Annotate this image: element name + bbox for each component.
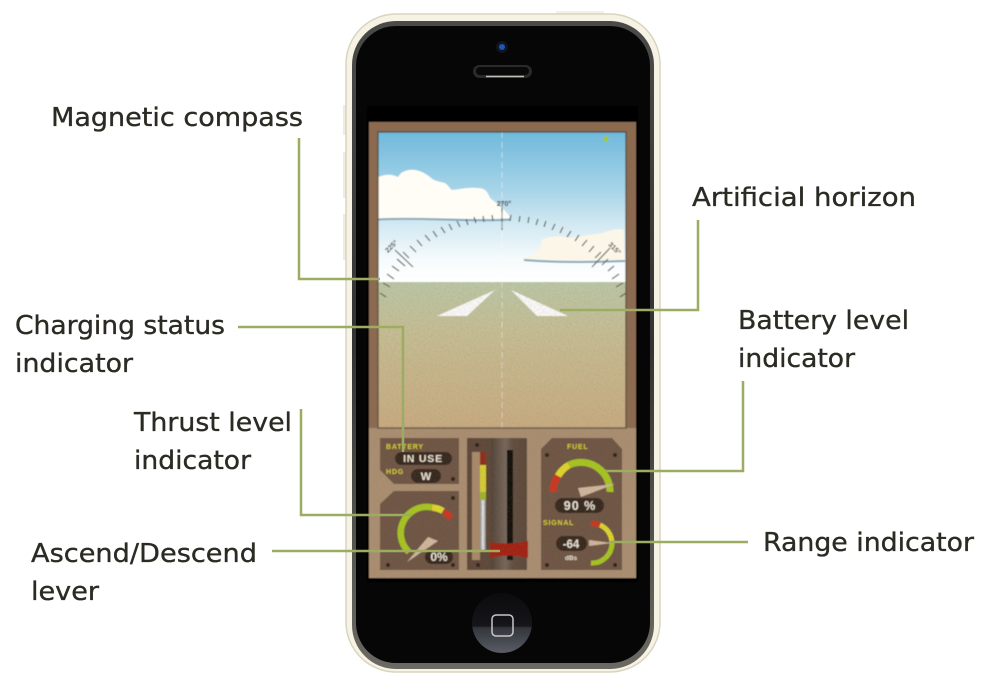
- leader line: battery level: [605, 381, 743, 471]
- artificial horizon view: [378, 132, 626, 428]
- label: thrust level indicator: indicator: [134, 446, 251, 476]
- compass degree labels: 315°: [606, 241, 623, 257]
- label: ascend descend lever: Ascend/Descend: [31, 539, 257, 569]
- home button: [472, 593, 532, 653]
- panel: fuel and signal: FUEL: [567, 444, 588, 451]
- app screen: [367, 106, 638, 582]
- panel: battery and heading: IN USE: [403, 453, 443, 465]
- panel: battery and heading: BATTERY: [386, 444, 424, 451]
- compass arc: [380, 202, 626, 297]
- panel: fuel and signal: [541, 438, 622, 570]
- leader line: magnetic compass: [299, 138, 380, 279]
- panel: fuel and signal: -64: [563, 539, 580, 551]
- label: magnetic compass: Magnetic compass: [51, 103, 303, 133]
- panel: fuel and signal: dBs: [565, 555, 578, 562]
- label: charging status indicator: Charging status: [15, 311, 225, 341]
- panel: fuel and signal: 90 %: [564, 499, 596, 513]
- centre line: [501, 132, 503, 428]
- label: charging status indicator: indicator: [15, 349, 133, 379]
- panel: battery and heading: W: [421, 471, 432, 483]
- panel: battery and heading: [380, 438, 459, 484]
- panel: fuel and signal: SIGNAL: [543, 520, 574, 527]
- panel: ascend descend lever: [467, 438, 528, 570]
- label: range indicator: Range indicator: [763, 528, 974, 558]
- compass degree labels: 225°: [384, 238, 400, 255]
- camera: [496, 41, 508, 53]
- icon: cloud left: [378, 170, 510, 220]
- label: battery level indicator: indicator: [738, 344, 855, 374]
- label: ascend descend lever: lever: [31, 577, 99, 607]
- compass degree labels: [384, 200, 623, 257]
- panel: thrust gauge: [380, 491, 459, 570]
- label: thrust level indicator: Thrust level: [133, 408, 292, 438]
- leader line: range: [610, 541, 748, 543]
- compass degree labels: 270°: [497, 200, 511, 208]
- leader line: thrust level: [301, 409, 412, 515]
- leader line: ascend descend: [272, 550, 500, 552]
- status dot: [604, 136, 608, 142]
- leader line: artificial horizon: [560, 220, 698, 310]
- leader line: charging status: [238, 327, 403, 452]
- phone body: [343, 11, 660, 672]
- label: artificial horizon: Artificial horizon: [692, 183, 916, 213]
- label: battery level indicator: Battery level: [738, 306, 909, 336]
- panel: battery and heading: HDG: [386, 469, 404, 476]
- speaker: [473, 65, 532, 78]
- panel: thrust gauge: 0%: [430, 550, 448, 564]
- horizon wings: [437, 290, 568, 316]
- icon: cloud right: [523, 229, 624, 261]
